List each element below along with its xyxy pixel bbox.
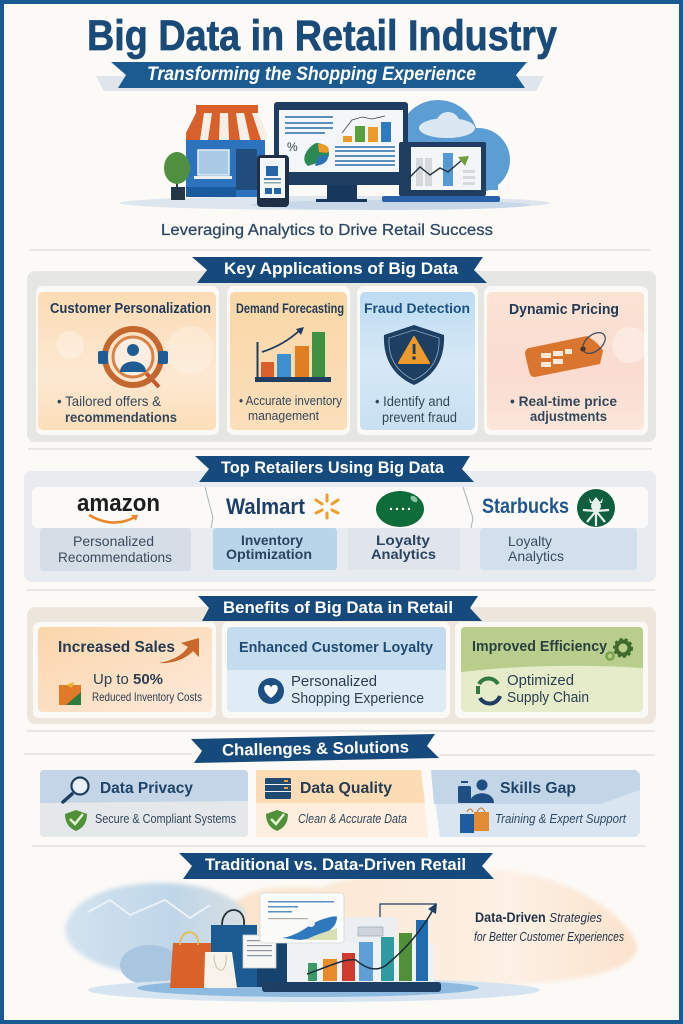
- bullet text: • Tailored offers &: [57, 393, 162, 409]
- retailer: starbucks: Loyalty: [508, 533, 552, 549]
- traditional vs data-driven illustration: [65, 869, 637, 1002]
- icon: inventory box: [59, 682, 81, 705]
- section ribbon: traditional vs data-driven: [179, 853, 494, 879]
- tagline: Leveraging Analytics to Drive Retail Success: [161, 222, 493, 239]
- card: data quality: Clean & Accurate Data: [298, 812, 407, 826]
- caption: Data-Driven Strategies: [475, 909, 602, 925]
- title: Big Data in Retail Industry: [87, 12, 557, 60]
- background blobs: [65, 869, 637, 986]
- card: increased sales: Reduced Inventory Costs: [92, 690, 202, 704]
- caption: [474, 909, 624, 944]
- retailer: walmart: [213, 494, 338, 570]
- icon: shopping bags: [170, 910, 287, 988]
- section ribbon: challenges: [191, 734, 439, 763]
- retailer: green loyalty bubble: [348, 491, 460, 570]
- icon: rising bar chart: [255, 327, 331, 382]
- card: dynamic pricing: adjustments: [530, 408, 607, 424]
- card: improved efficiency: [455, 622, 648, 718]
- bullet text: • Real-time price: [510, 393, 617, 409]
- icon: green check shield: [65, 810, 87, 831]
- heading: Demand Forecasting: [236, 301, 344, 316]
- section ribbon: key applications: [192, 257, 487, 283]
- card: demand forecasting: [227, 286, 350, 435]
- retailer: green loyalty bubble: Analytics: [371, 546, 436, 562]
- bullet text: • Identify and: [375, 394, 450, 409]
- heading: Improved Efficiency: [472, 638, 608, 655]
- section ribbon: top retailers: [195, 456, 474, 482]
- heading: Increased Sales: [58, 639, 175, 656]
- card: data quality: Data Quality: [300, 780, 392, 797]
- card: data privacy: [40, 770, 248, 837]
- icon: desktop monitor with charts: [274, 102, 408, 202]
- card: enhanced customer loyalty: Personalized: [291, 673, 377, 690]
- icon: rising arrow: [159, 638, 199, 663]
- retailer: walmart: Optimization: [226, 546, 312, 562]
- stat text: Up to 50%: [93, 671, 163, 688]
- card: data privacy: Data Privacy: [100, 780, 193, 797]
- card: improved efficiency: Optimized: [507, 672, 574, 689]
- icon: price tag: [525, 329, 609, 377]
- subtitle text: Transforming the Shopping Experience: [147, 64, 476, 85]
- card: skills gap: [431, 770, 640, 837]
- subtitle ribbon: [96, 62, 544, 91]
- section ribbon: key applications: Key Applications of Big Data: [224, 259, 459, 278]
- icon: heart badge: [258, 678, 284, 704]
- floating analytics card: [260, 893, 344, 943]
- card: enhanced customer loyalty: [222, 622, 450, 718]
- panel: benefits of big data in retail: [27, 596, 656, 724]
- section ribbon: benefits: Benefits of Big Data in Retail: [223, 599, 453, 617]
- icon: people with briefcase: [458, 780, 494, 803]
- retailer: starbucks: Starbucks: [482, 495, 569, 518]
- section ribbon: benefits: [198, 596, 482, 621]
- card: increased sales: [33, 622, 216, 718]
- icon: warning shield: [384, 325, 444, 385]
- card: customer personalization: recommendations: [65, 409, 177, 425]
- icon: cloud: [398, 100, 510, 192]
- retailer: amazon: Personalized: [73, 533, 154, 549]
- section ribbon: top retailers: Top Retailers Using Big Data: [221, 459, 445, 477]
- card: fraud detection: prevent fraud: [382, 410, 457, 425]
- heading: Dynamic Pricing: [509, 301, 619, 318]
- card: skills gap: Skills Gap: [500, 780, 576, 797]
- retailer: starbucks: [480, 489, 637, 570]
- card: data quality: [256, 770, 428, 837]
- section: challenges and solutions: [24, 734, 655, 837]
- icon: smartphone: [257, 155, 289, 207]
- icon: storefront: [186, 105, 267, 197]
- ground shadow: [88, 978, 540, 1002]
- card: data privacy: Secure & Compliant Systems: [95, 812, 236, 826]
- icon: recycling loop: [478, 679, 500, 704]
- icon: potted tree: [164, 152, 190, 200]
- card: improved efficiency: Supply Chain: [507, 689, 589, 706]
- bullet text: • Accurate inventory: [239, 394, 343, 408]
- panel: top retailers using big data: [24, 456, 656, 582]
- icon: desktop monitor with charts: %: [287, 140, 298, 154]
- retailer: walmart: Walmart: [226, 494, 306, 519]
- caption: for Better Customer Experiences: [474, 929, 624, 944]
- heading: Customer Personalization: [50, 301, 211, 317]
- retailer: walmart: Inventory: [241, 532, 303, 548]
- retailer: green loyalty bubble: Loyalty: [376, 532, 430, 548]
- heading: Enhanced Customer Loyalty: [239, 639, 434, 656]
- icon: magnifying glass: [63, 778, 88, 802]
- card: enhanced customer loyalty: Shopping Experience: [291, 690, 424, 707]
- icon: shopping bags: [460, 808, 489, 833]
- card: demand forecasting: management: [248, 409, 320, 423]
- hero illustration: store, monitor, phone, laptop and cloud: [120, 100, 550, 210]
- icon: server stack: [265, 778, 291, 799]
- heading: Fraud Detection: [364, 300, 470, 316]
- card: dynamic pricing: [484, 286, 648, 435]
- section ribbon: traditional vs data-driven: Traditional vs. Data-Driven Retail: [205, 855, 466, 874]
- icon: laptop with bar chart: [262, 903, 441, 992]
- card: skills gap: Training & Expert Support: [495, 812, 626, 826]
- section ribbon: challenges: Challenges & Solutions: [222, 738, 409, 760]
- icon: laptop with line chart: [382, 142, 500, 202]
- icon: green check shield: [266, 810, 288, 831]
- retailer: starbucks: Analytics: [508, 548, 564, 564]
- retailer: amazon: [40, 490, 191, 571]
- retailer: amazon: amazon: [77, 490, 160, 517]
- card: customer personalization: [36, 286, 219, 435]
- retailer: amazon: Recommendations: [58, 549, 172, 565]
- icon: target with customer: [98, 329, 168, 387]
- card: fraud detection: [357, 286, 478, 435]
- icon: gears: [606, 639, 632, 660]
- panel: key applications of big data: [27, 257, 656, 442]
